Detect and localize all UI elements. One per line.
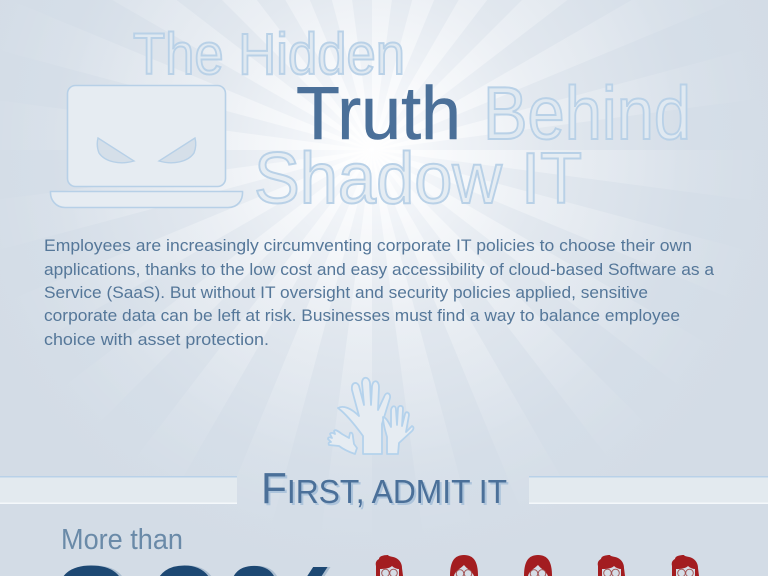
banner band: left [0, 476, 237, 504]
person icon: man [376, 555, 403, 576]
icon: raised hands [328, 378, 414, 454]
icon: laptop with angry eyes [50, 86, 243, 208]
title: The Hidden Truth Behind Shadow IT [133, 22, 691, 219]
intro paragraph: Service (SaaS). But without IT oversight and security policies applied, sensitive [44, 283, 648, 302]
label: More than: More than [61, 524, 183, 556]
title line: The Hidden: The Hidden [133, 22, 405, 87]
heading text: FIRST, ADMIT IT [261, 464, 507, 513]
section banner [0, 466, 768, 515]
intro paragraph: corporate data can be left at risk. Businesses must find a way to balance employee [44, 306, 680, 325]
intro paragraph: applications, thanks to the low cost and easy accessibility of cloud-based Software as a [44, 260, 715, 279]
person icon: man [672, 555, 699, 576]
person icon: woman [450, 555, 478, 576]
intro paragraph [44, 236, 715, 349]
person icon: man [598, 555, 625, 576]
person icon: woman [524, 555, 552, 576]
heading shadow: FIRST, ADMIT IT [263, 466, 509, 515]
intro paragraph: Employees are increasingly circumventing corporate IT policies to choose their own [44, 236, 692, 255]
title word: Truth: Truth [296, 71, 461, 155]
banner band: right [529, 476, 768, 504]
intro paragraph: choice with asset protection. [44, 330, 269, 349]
title line: Shadow IT: Shadow IT [254, 139, 582, 219]
title word: Behind: Behind [483, 71, 691, 155]
row of people icons [376, 555, 699, 576]
